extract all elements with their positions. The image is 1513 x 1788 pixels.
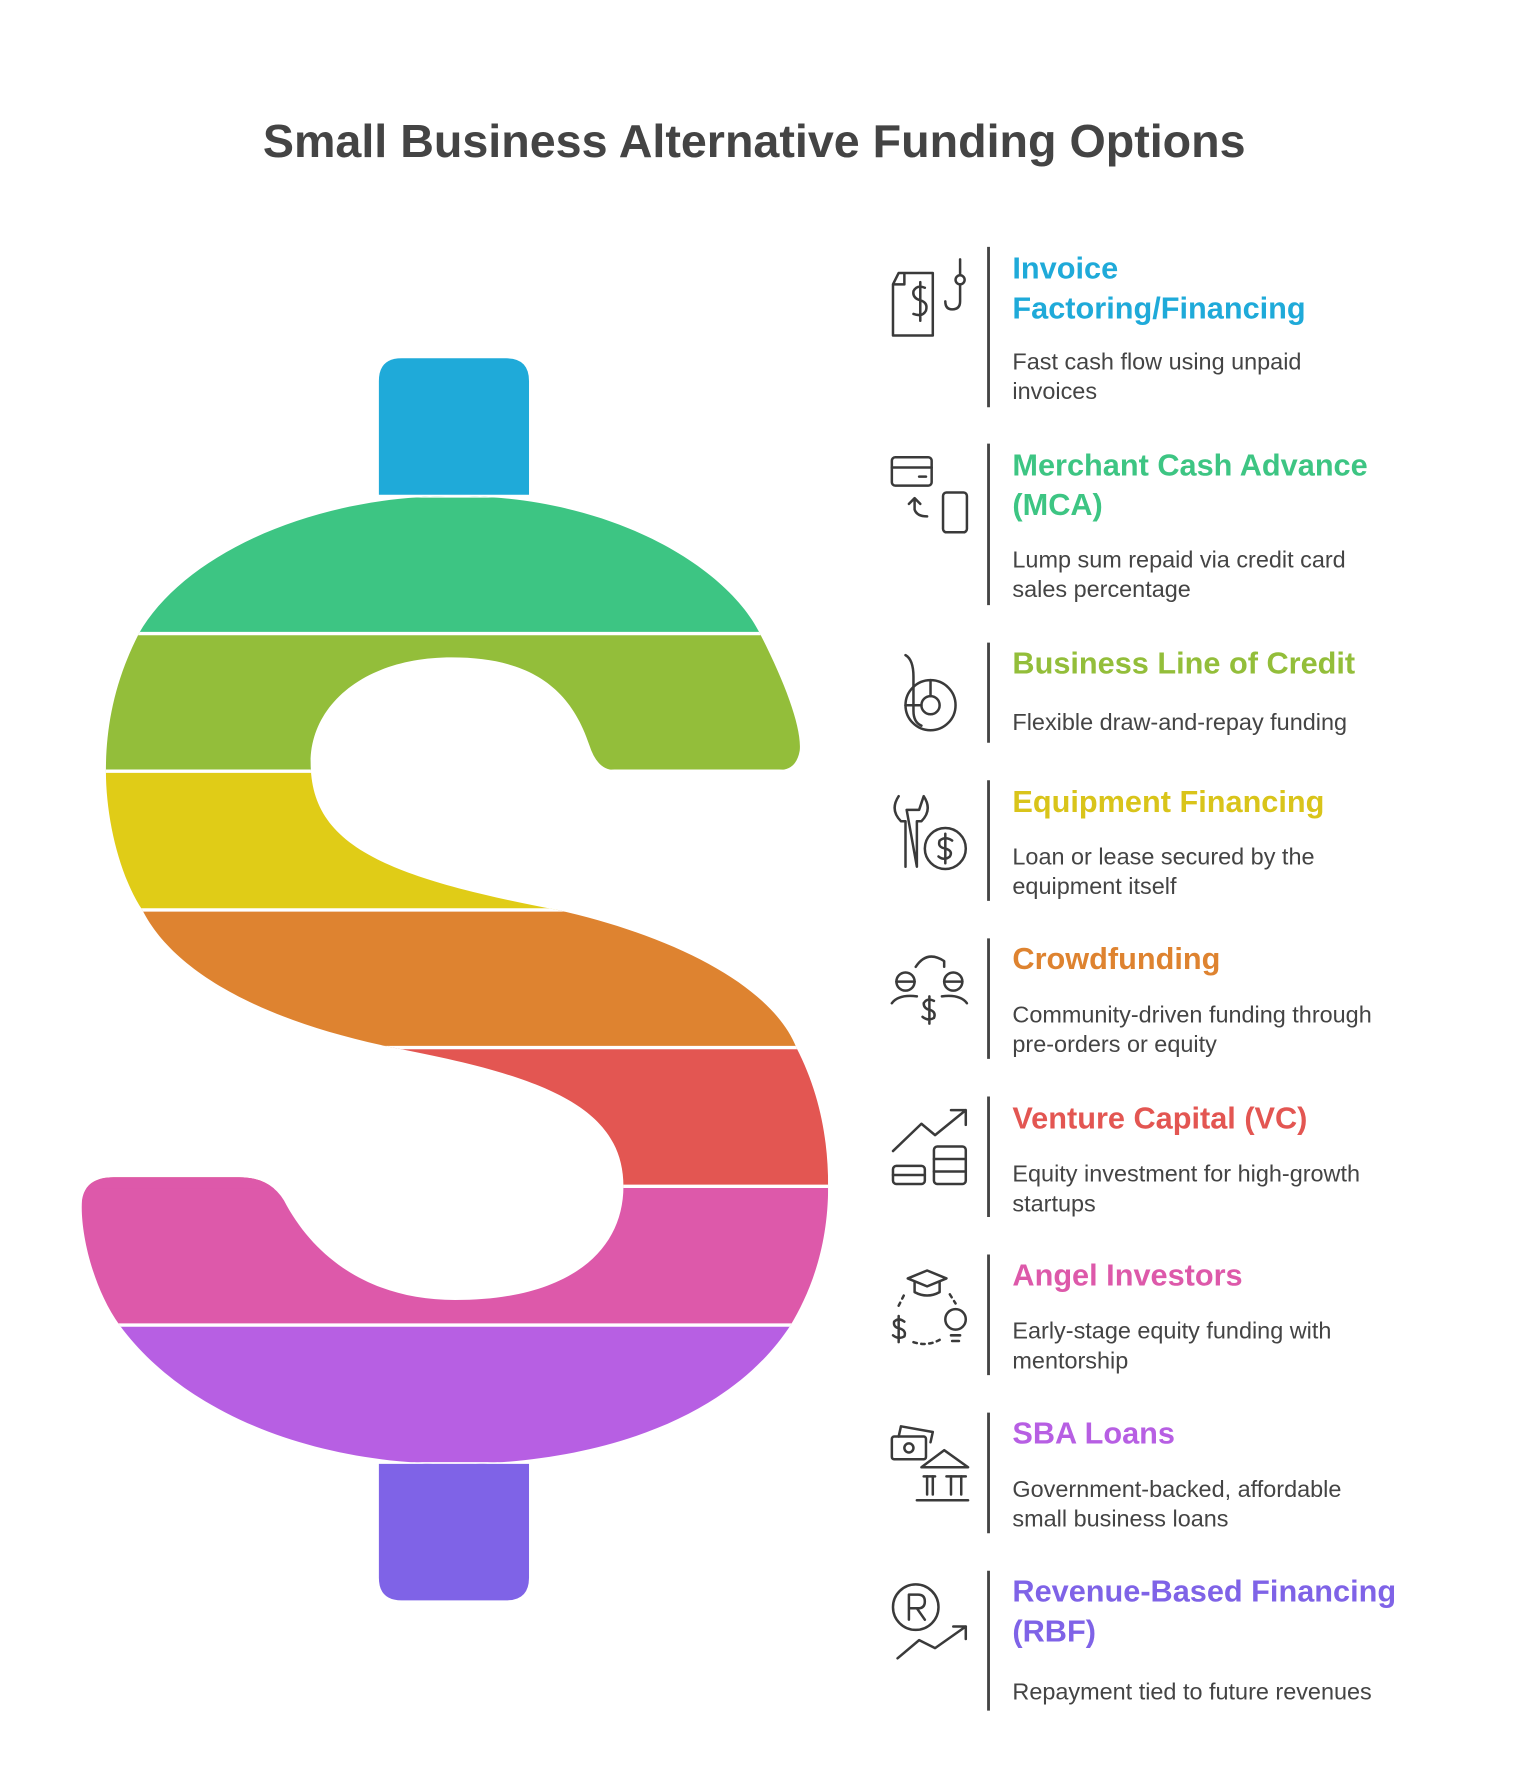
- item: equipment financing: Loan or lease secured by the: [1012, 843, 1315, 869]
- item: venture capital: Equity investment for high-growth: [1012, 1161, 1360, 1187]
- item: equipment financing: Equipment Financing: [1012, 784, 1324, 819]
- icon: growth chart with coins: [893, 1110, 966, 1184]
- icon: people exchange: [892, 957, 967, 1024]
- icon: card and phone: [892, 457, 967, 532]
- icon: cap, dollar, bulb: [893, 1270, 966, 1344]
- title: Small Business Alternative Funding Options: [263, 115, 1246, 167]
- item: angel investors: [893, 1255, 1331, 1375]
- icon: wrench and coin: [895, 796, 966, 869]
- item: angel investors: Early-stage equity funding with: [1012, 1318, 1331, 1344]
- item: invoice factoring: Invoice: [1012, 251, 1118, 286]
- item: merchant cash advance: [892, 444, 1368, 605]
- item: crowdfunding: pre-orders or equity: [1012, 1031, 1217, 1057]
- item: revenue-based financing: [893, 1571, 1396, 1711]
- item: invoice factoring: Fast cash flow using unpaid: [1012, 349, 1301, 375]
- item: venture capital: Venture Capital (VC): [1012, 1100, 1307, 1135]
- icon: credit line: [906, 655, 956, 730]
- item: invoice factoring: Factoring/Financing: [1012, 290, 1306, 325]
- item: revenue-based financing: Revenue-Based Financing: [1012, 1573, 1396, 1608]
- item: merchant cash advance: Merchant Cash Advance: [1012, 447, 1368, 482]
- item: equipment financing: [895, 780, 1324, 901]
- item: crowdfunding: Community-driven funding through: [1012, 1002, 1372, 1028]
- item: merchant cash advance: Lump sum repaid via credit card: [1012, 547, 1346, 573]
- dollar sign graphic: [82, 358, 828, 1600]
- item: equipment financing: equipment itself: [1012, 873, 1177, 899]
- item: venture capital: startups: [1012, 1190, 1096, 1216]
- item: SBA loans: small business loans: [1012, 1505, 1229, 1531]
- item: revenue-based financing: (RBF): [1012, 1613, 1096, 1648]
- item: merchant cash advance: sales percentage: [1012, 576, 1191, 602]
- item: merchant cash advance: (MCA): [1012, 487, 1103, 522]
- item: business line of credit: [906, 643, 1355, 743]
- item: SBA loans: Government-backed, affordable: [1012, 1476, 1341, 1502]
- item: invoice factoring: [893, 247, 1306, 407]
- item: SBA loans: [892, 1413, 1341, 1533]
- item: angel investors: mentorship: [1012, 1347, 1128, 1373]
- item: business line of credit: Business Line of Credit: [1012, 645, 1355, 680]
- top tab: [379, 358, 529, 495]
- icon: cash and bank: [892, 1426, 968, 1500]
- item: revenue-based financing: Repayment tied to future revenues: [1012, 1678, 1372, 1704]
- item: crowdfunding: [892, 938, 1372, 1059]
- icon: R coin with trend: [893, 1584, 966, 1658]
- item: SBA loans: SBA Loans: [1012, 1415, 1175, 1450]
- item: angel investors: Angel Investors: [1012, 1257, 1243, 1292]
- item: invoice factoring: invoices: [1012, 378, 1097, 404]
- item: crowdfunding: Crowdfunding: [1012, 941, 1220, 976]
- item: business line of credit: Flexible draw-and-repay funding: [1012, 709, 1347, 735]
- bottom tab: [379, 1464, 529, 1600]
- icon: invoice hook: [893, 259, 965, 336]
- item: venture capital: [893, 1096, 1360, 1217]
